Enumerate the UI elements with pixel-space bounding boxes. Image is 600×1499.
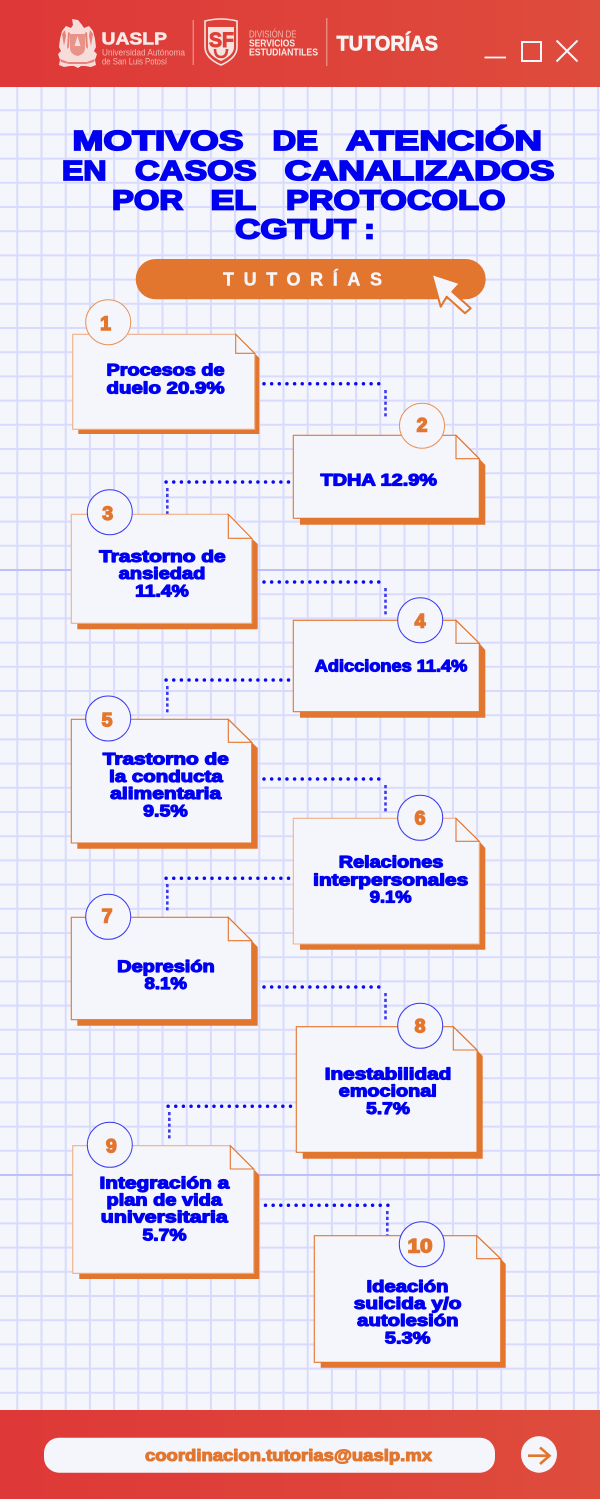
- title: ATENCIÓN: [346, 125, 542, 156]
- title: EL: [210, 184, 256, 216]
- logo text: División de Servicios Estudiantiles: ESTUDIANTILES: [249, 48, 318, 59]
- card 3: Trastorno de ansiedad: Trastorno de: [99, 548, 226, 566]
- connector 4 to 5: [166, 680, 288, 714]
- card 7: Depresión: [71, 894, 258, 1026]
- icon: SFU shield: [205, 19, 237, 65]
- tutorías pill button: [136, 259, 486, 313]
- card 6: Relaciones interpersonales: [293, 795, 485, 950]
- card 9: Integración a plan de vida universitaria: Integración a: [100, 1175, 230, 1193]
- icon: arrow button: [521, 1436, 557, 1473]
- connector 1 to 2: [264, 384, 386, 418]
- card 9: Integración a plan de vida universitaria: [73, 1122, 259, 1279]
- title: [62, 125, 554, 244]
- card 1: Procesos de duelo: [73, 300, 259, 434]
- icon: cursor arrow: [432, 274, 471, 313]
- card 5: Trastorno de la conducta alimentaria: [71, 696, 258, 849]
- card 5: Trastorno de la conducta alimentaria: alimentaria: [110, 785, 222, 803]
- card 1: Procesos de duelo: 1: [100, 313, 111, 335]
- card 9: Integración a plan de vida universitaria: 9: [106, 1136, 117, 1158]
- icon: SFU shield: SF: [209, 29, 234, 52]
- card 10: Ideación suicida y/o autolesión: [314, 1222, 506, 1368]
- card 6: Relaciones interpersonales: Relaciones: [339, 854, 443, 872]
- card 10: Ideación suicida y/o autolesión: 10: [408, 1236, 433, 1258]
- card 9: Integración a plan de vida universitaria: 5.7%: [142, 1227, 186, 1245]
- card 9: Integración a plan de vida universitaria: universitaria: [101, 1209, 229, 1227]
- connector 7 to 8: [264, 987, 386, 1021]
- card 4: Adicciones: Adicciones 11.4%: [315, 658, 467, 676]
- logo text: División de Servicios Estudiantiles: DIVISIÓN DE: [249, 28, 297, 41]
- connector 3 to 4: [264, 582, 386, 616]
- icon: UASLP crest: [58, 19, 97, 68]
- card 6: Relaciones interpersonales: 9.1%: [370, 889, 412, 907]
- card 10: Ideación suicida y/o autolesión: suicida y/o: [354, 1295, 462, 1313]
- card 1: Procesos de duelo: duelo 20.9%: [106, 380, 224, 398]
- title: EN: [62, 155, 106, 186]
- title: PROTOCOLO: [286, 184, 506, 216]
- header bar: [0, 0, 600, 87]
- card 3: Trastorno de ansiedad: 11.4%: [135, 583, 189, 601]
- icon: maximize: [522, 42, 541, 61]
- card 10: Ideación suicida y/o autolesión: autolesión: [357, 1312, 458, 1330]
- title: CANALIZADOS: [284, 155, 554, 186]
- card 4: Adicciones: [293, 598, 485, 718]
- logo text: UASLP: [102, 28, 185, 67]
- card 7: Depresión: 8.1%: [144, 975, 187, 993]
- tutorías pill button: TUTORÍAS: [223, 269, 382, 290]
- card 3: Trastorno de ansiedad: ansiedad: [119, 565, 205, 583]
- title: MOTIVOS: [72, 125, 244, 156]
- card 7: Depresión: Depresión: [117, 958, 215, 976]
- connector 9 to 10: [266, 1205, 388, 1236]
- title: DE: [272, 125, 318, 156]
- card 5: Trastorno de la conducta alimentaria: 5: [102, 710, 113, 732]
- logo text: División de Servicios Estudiantiles: SERVICIOS: [249, 39, 295, 50]
- title: POR: [112, 184, 183, 216]
- card 9: Integración a plan de vida universitaria: plan de vida: [106, 1192, 223, 1210]
- card 10: Ideación suicida y/o autolesión: Ideación: [366, 1278, 448, 1296]
- connector 5 to 6: [264, 779, 386, 813]
- card 4: Adicciones: 4: [415, 611, 426, 633]
- card 3: Trastorno de ansiedad: [71, 490, 258, 629]
- card 8: Inestabilidad emocional: Inestabilidad: [325, 1065, 451, 1083]
- card 5: Trastorno de la conducta alimentaria: 9.5%: [143, 803, 188, 821]
- card 5: Trastorno de la conducta alimentaria: Trastorno de: [103, 751, 229, 769]
- title: CASOS: [135, 155, 256, 186]
- email pill: [44, 1438, 495, 1473]
- card 1: Procesos de duelo: Procesos de: [106, 362, 224, 380]
- card 2: TDHA: TDHA 12.9%: [320, 472, 437, 490]
- card 5: Trastorno de la conducta alimentaria: la conducta: [109, 768, 224, 786]
- logo text: División de Servicios Estudiantiles: [249, 28, 318, 59]
- header label: Tutorías: TUTORÍAS: [336, 30, 438, 56]
- footer bar: [0, 1410, 600, 1499]
- card 8: Inestabilidad emocional: 5.7%: [366, 1100, 410, 1118]
- logo text: UASLP: UASLP: [102, 28, 167, 48]
- connector 6 to 7: [166, 878, 288, 912]
- card 2: TDHA: [293, 403, 485, 525]
- card 7: Depresión: 7: [102, 906, 112, 928]
- connector 2 to 3: [166, 482, 288, 514]
- card 8: Inestabilidad emocional: emocional: [339, 1083, 437, 1101]
- logo text: UASLP: de San Luis Potosí: [102, 57, 167, 67]
- card 6: Relaciones interpersonales: 6: [415, 807, 426, 829]
- card 3: Trastorno de ansiedad: 3: [102, 503, 113, 525]
- email pill: coordinacion.tutorias@uaslp.mx: [145, 1446, 433, 1465]
- logo text: UASLP: Universidad Autónoma: [102, 48, 185, 58]
- title: CGTUT: [235, 214, 356, 244]
- card 6: Relaciones interpersonales: interpersonales: [313, 872, 468, 890]
- icon: minimize: [484, 57, 506, 58]
- connector 8 to 9: [168, 1106, 290, 1140]
- title: :: [364, 214, 375, 244]
- card 2: TDHA: 2: [417, 415, 428, 437]
- card 8: Inestabilidad emocional: 8: [415, 1015, 426, 1037]
- card 8: Inestabilidad emocional: [296, 1003, 483, 1159]
- card 10: Ideación suicida y/o autolesión: 5.3%: [385, 1330, 430, 1348]
- icon: close: [556, 40, 578, 62]
